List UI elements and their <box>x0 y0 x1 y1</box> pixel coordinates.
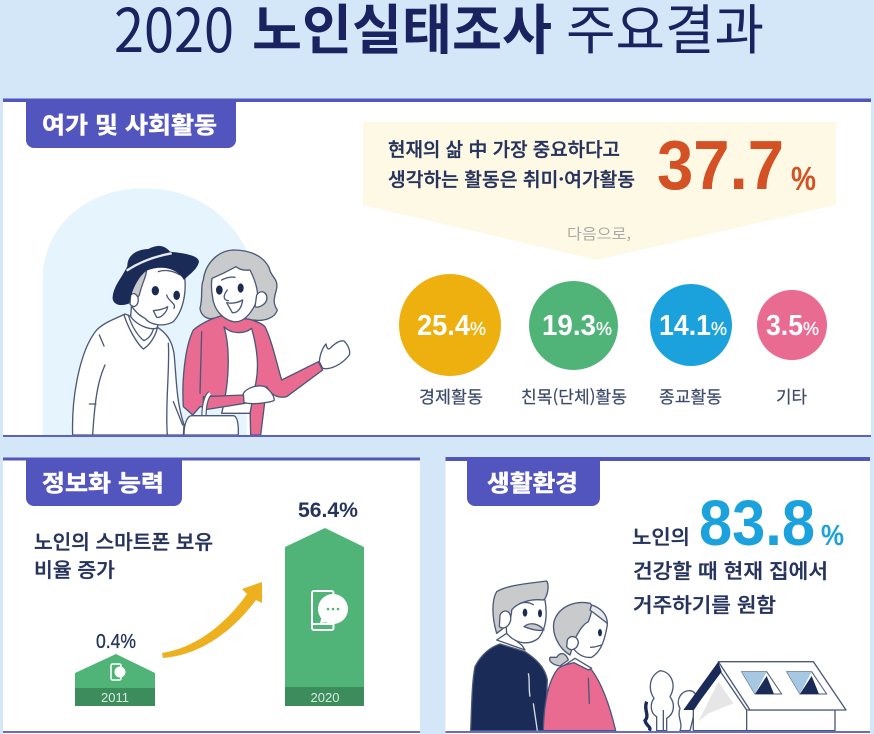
text: stay at current home: % <box>821 520 844 552</box>
callout: top activity: 다음으로, <box>567 223 631 244</box>
stat: economic activity <box>399 274 501 408</box>
stat: economic activity: 25.4 <box>417 310 470 342</box>
woman hair <box>200 250 277 320</box>
heading tab: leisure <box>26 102 236 148</box>
stat: other: 기타 <box>776 383 807 408</box>
bar: 2020 <box>285 499 364 706</box>
heading tab: digital literacy: 정보화 능력 <box>42 464 164 498</box>
stat: religious activity <box>650 284 732 408</box>
stat: other: 3.5 <box>766 310 803 342</box>
text: smartphone ownership: 노인의 스마트폰 보유 <box>34 526 213 555</box>
icon: small phone <box>111 664 126 680</box>
text: stay at current home: 노인의 <box>632 521 690 550</box>
callout: top activity <box>363 122 836 260</box>
bar: 2011: 0.4% <box>96 631 136 653</box>
bar: 2011: 2011 <box>101 690 129 705</box>
icon: phone with chat bubble <box>312 591 348 630</box>
stat: friendship activity: % <box>596 319 612 339</box>
stat: economic activity: % <box>470 319 486 339</box>
stat: religious activity: % <box>711 319 727 339</box>
man body <box>73 314 184 435</box>
callout: top activity: 현재의 삶 中 가장 중요하다고 <box>388 135 620 162</box>
bar: 2020: 56.4% <box>298 499 358 522</box>
heading tab: digital literacy <box>26 460 182 506</box>
text: smartphone ownership <box>34 526 213 583</box>
heading tab: living environment <box>467 460 600 506</box>
text: smartphone ownership: 비율 증가 <box>34 554 115 583</box>
man head <box>129 263 185 325</box>
stat: other: % <box>803 319 819 339</box>
panel: leisure and social activity <box>3 98 871 437</box>
stat: friendship activity: 19.3 <box>542 310 596 342</box>
arrow: growth <box>162 582 262 658</box>
title <box>114 0 764 70</box>
woman body <box>183 316 323 435</box>
woman <box>550 654 568 666</box>
text: stay at current home <box>632 487 844 618</box>
man <box>471 644 547 731</box>
stat: religious activity: 14.1 <box>659 310 711 342</box>
callout: top activity: % <box>791 160 816 197</box>
text: stay at current home: 건강할 때 현재 집에서 <box>633 555 828 584</box>
house <box>693 670 747 731</box>
bar: 2011 <box>75 631 155 706</box>
woman face <box>211 267 258 322</box>
bar: 2020: 2020 <box>311 690 339 705</box>
stat: religious activity: 종교활동 <box>659 383 722 408</box>
panel: digital literacy <box>3 458 420 734</box>
stat: friendship activity <box>521 281 627 408</box>
text: stay at current home: 거주하기를 원함 <box>633 589 776 618</box>
text: stay at current home: 83.8 <box>699 487 815 559</box>
stat: other <box>757 290 827 408</box>
illustration: elderly couple talking <box>43 188 350 435</box>
stat: economic activity: 경제활동 <box>419 383 483 408</box>
illustration: couple looking at house <box>471 581 846 731</box>
heading tab: leisure: 여가 및 사회활동 <box>42 106 217 140</box>
man hat <box>113 246 199 305</box>
trees <box>650 671 673 731</box>
callout: top activity: 생각하는 활동은 취미·여가활동 <box>388 165 635 192</box>
heading tab: living environment: 생활환경 <box>487 464 578 498</box>
panel: living environment <box>446 457 870 734</box>
stat: friendship activity: 친목(단체)활동 <box>521 383 627 408</box>
woman arm and bag <box>203 395 245 410</box>
callout: top activity: 37.7 <box>657 126 784 204</box>
